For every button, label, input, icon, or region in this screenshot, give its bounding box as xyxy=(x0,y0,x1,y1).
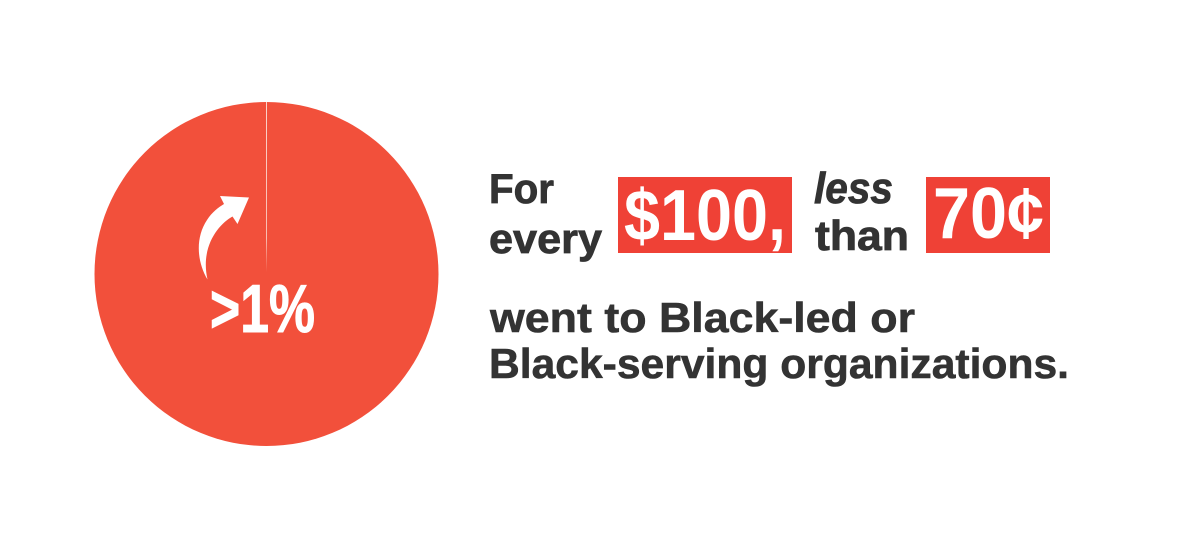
icon: curved arrow pointing to sliver xyxy=(199,196,249,280)
highlight: 70 cents: 70¢ xyxy=(933,174,1044,254)
text: went to Black-led or Black-serving organizations: went to Black-led or xyxy=(489,294,915,341)
text: less than: less xyxy=(814,164,893,213)
text: went to Black-led or Black-serving organizations xyxy=(489,294,1069,387)
text: went to Black-led or Black-serving organizations: Black-serving organizations. xyxy=(489,340,1069,387)
text: For every: every xyxy=(489,215,603,262)
text: less than: than xyxy=(815,212,909,259)
text: For every xyxy=(489,165,603,262)
pie label: >1%: >1% xyxy=(210,271,315,347)
pie chart: share of funding xyxy=(94,102,438,446)
text: For every: For xyxy=(489,165,554,212)
text: less than xyxy=(814,164,909,259)
highlight: $100: $100, xyxy=(624,176,786,256)
